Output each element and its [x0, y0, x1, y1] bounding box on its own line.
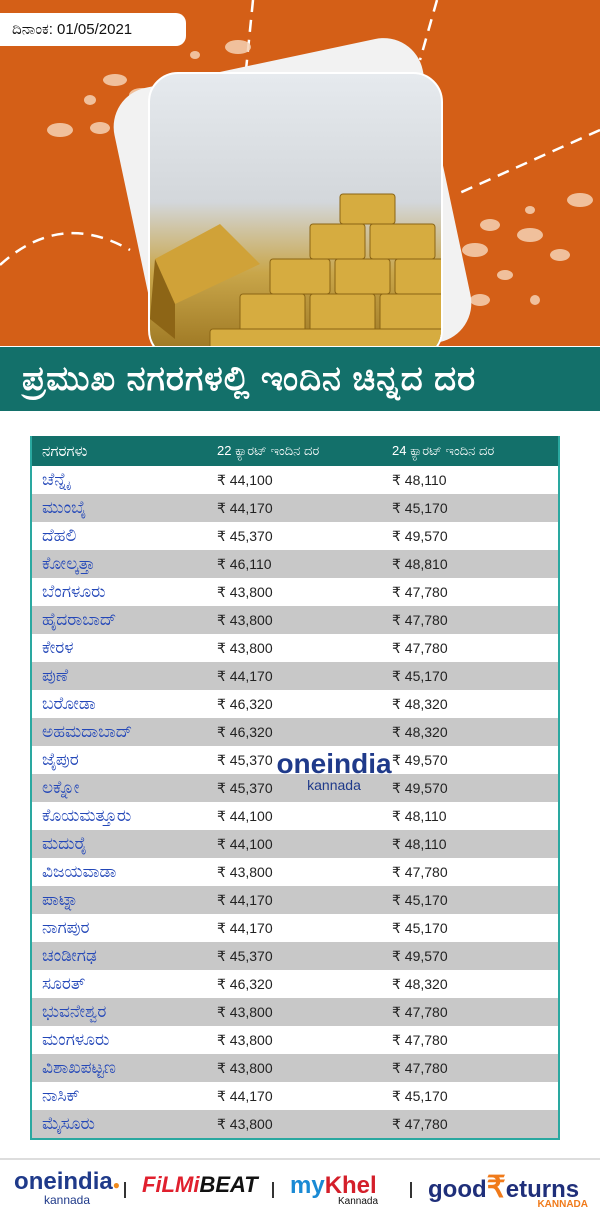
- table: city gold rates: ₹ 45,170: [392, 1088, 448, 1104]
- table: city gold rates: ಲಕ್ನೋ: [42, 778, 79, 797]
- table: city gold rates: ₹ 44,170: [217, 500, 273, 516]
- table: city gold rates: ₹ 43,800: [217, 612, 273, 628]
- table: city gold rates: ₹ 48,810: [392, 556, 448, 572]
- table: city gold rates: ಮಂಗಳೂರು: [42, 1030, 109, 1049]
- table: city gold rates: ₹ 49,570: [392, 948, 448, 964]
- table: city gold rates: ಭುವನೇಶ್ವರ: [42, 1002, 106, 1021]
- table: city gold rates: ಜೈಪುರ: [42, 750, 79, 769]
- title bar: ಪ್ರಮುಖ ನಗರಗಳಲ್ಲಿ ಇಂದಿನ ಚಿನ್ನದ ದರ: [22, 360, 476, 398]
- logo: goodreturns: KANNADA: [537, 1199, 588, 1210]
- table: city gold rates: ಪಾಟ್ನಾ: [42, 890, 78, 909]
- table: city gold rates: ₹ 49,570: [392, 780, 448, 796]
- table: city gold rates: ₹ 47,780: [392, 640, 448, 656]
- table: city gold rates: ₹ 46,320: [217, 724, 273, 740]
- table: city gold rates: ₹ 45,370: [217, 780, 273, 796]
- table: city gold rates: ₹ 45,170: [392, 500, 448, 516]
- watermark: oneindia kannada: [276, 748, 392, 793]
- logo: mykhel: myKhel: [290, 1172, 377, 1199]
- table: city gold rates: ₹ 48,320: [392, 976, 448, 992]
- table: city gold rates: ಮದುರೈ: [42, 834, 87, 853]
- logo: goodreturns: good₹eturns: [428, 1171, 579, 1204]
- footer logos: [0, 1158, 600, 1219]
- table: city gold rates: ₹ 49,570: [392, 752, 448, 768]
- table: city gold rates: ₹ 46,320: [217, 976, 273, 992]
- table: city gold rates: ಕೇರಳ: [42, 638, 73, 657]
- table: city gold rates: ₹ 47,780: [392, 864, 448, 880]
- table: city gold rates: ಕೊಯಮತ್ತೂರು: [42, 806, 131, 825]
- watermark: oneindia kannada: kannada: [307, 777, 361, 793]
- table: city gold rates: [30, 436, 560, 1140]
- table: city gold rates: ₹ 47,780: [392, 1004, 448, 1020]
- table: city gold rates: ವಿಜಯವಾಡಾ: [42, 862, 116, 881]
- table: city gold rates: ₹ 45,170: [392, 920, 448, 936]
- table: city gold rates: ಅಹಮದಾಬಾದ್: [42, 722, 132, 741]
- table: city gold rates: ₹ 49,570: [392, 528, 448, 544]
- table: city gold rates: ₹ 48,110: [392, 808, 447, 824]
- table: city gold rates: ₹ 45,370: [217, 752, 273, 768]
- table: city gold rates: ₹ 47,780: [392, 584, 448, 600]
- table: city gold rates: ₹ 45,370: [217, 528, 273, 544]
- table: city gold rates: 22 ಕ್ಯಾರಟ್ ಇಂದಿನ ದರ: [217, 443, 319, 458]
- table: city gold rates: ₹ 46,320: [217, 696, 273, 712]
- table: city gold rates: ₹ 46,110: [217, 556, 272, 572]
- gold photo: [148, 72, 443, 360]
- table: city gold rates: ₹ 44,170: [217, 668, 273, 684]
- table: city gold rates: ನಾಸಿಕ್: [42, 1086, 80, 1105]
- table: city gold rates: ₹ 47,780: [392, 1032, 448, 1048]
- table: city gold rates: ₹ 45,170: [392, 668, 448, 684]
- table: city gold rates: ₹ 44,170: [217, 1088, 273, 1104]
- table: city gold rates: ₹ 47,780: [392, 612, 448, 628]
- date tag: ದಿನಾಂಕ: 01/05/2021: [12, 21, 132, 38]
- table: city gold rates: ₹ 45,370: [217, 948, 273, 964]
- table: city gold rates: ಬರೋಡಾ: [42, 694, 96, 713]
- logo: filmibeat: FiLMiBEAT: [142, 1172, 258, 1197]
- table: city gold rates: ₹ 43,800: [217, 1116, 273, 1132]
- logo: mykhel: Kannada: [338, 1196, 378, 1207]
- table: city gold rates: ₹ 44,100: [217, 808, 273, 824]
- table: city gold rates: ₹ 45,170: [392, 892, 448, 908]
- table: city gold rates: ಚಂಡೀಗಢ: [42, 946, 97, 965]
- table: city gold rates: ₹ 43,800: [217, 1004, 273, 1020]
- table: city gold rates: ₹ 44,100: [217, 836, 273, 852]
- table: city gold rates: 24 ಕ್ಯಾರಟ್ ಇಂದಿನ ದರ: [392, 443, 494, 458]
- logo: oneindia: kannada: [44, 1193, 90, 1207]
- table: city gold rates: ಹೈದರಾಬಾದ್: [42, 610, 116, 629]
- table: city gold rates: ₹ 48,320: [392, 696, 448, 712]
- table: city gold rates: ₹ 43,800: [217, 1060, 273, 1076]
- table: city gold rates: ₹ 44,170: [217, 892, 273, 908]
- table: city gold rates: ಪುಣೆ: [42, 666, 68, 685]
- table: city gold rates: ₹ 48,320: [392, 724, 448, 740]
- title bar: [0, 347, 600, 411]
- watermark: oneindia kannada: oneindia: [276, 748, 392, 779]
- table: city gold rates: ₹ 43,800: [217, 1032, 273, 1048]
- table: city gold rates: ನಾಗಪುರ: [42, 918, 89, 937]
- table: city gold rates: ನಗರಗಳು: [42, 442, 87, 460]
- photo card: [106, 31, 479, 399]
- table: city gold rates: ಸೂರತ್: [42, 974, 85, 993]
- table: city gold rates: ಮೈಸೂರು: [42, 1114, 95, 1133]
- table: city gold rates: ₹ 47,780: [392, 1060, 448, 1076]
- date tag: [0, 13, 186, 46]
- table: city gold rates: ಬೆಂಗಳೂರು: [42, 582, 106, 601]
- logo: oneindia: [14, 1168, 120, 1207]
- header banner: [0, 0, 600, 346]
- table: city gold rates: ₹ 44,170: [217, 920, 273, 936]
- table: city gold rates: ₹ 43,800: [217, 584, 273, 600]
- table: city gold rates: ₹ 47,780: [392, 1116, 448, 1132]
- table: city gold rates: ಚೆನ್ನೈ: [42, 470, 70, 489]
- table: city gold rates: ವಿಶಾಖಪಟ್ಟಣ: [42, 1058, 116, 1077]
- table: city gold rates: ₹ 44,100: [217, 472, 273, 488]
- table: city gold rates: ಮುಂಬೈ: [42, 498, 86, 517]
- logo: oneindia: oneindia●: [14, 1168, 120, 1195]
- table: city gold rates: ₹ 48,110: [392, 836, 447, 852]
- table: city gold rates: ₹ 43,800: [217, 864, 273, 880]
- table: city gold rates: ಕೋಲ್ಕತ್ತಾ: [42, 554, 95, 573]
- table: city gold rates: ದೆಹಲಿ: [42, 526, 76, 545]
- table: city gold rates: ₹ 43,800: [217, 640, 273, 656]
- table: city gold rates: ₹ 48,110: [392, 472, 447, 488]
